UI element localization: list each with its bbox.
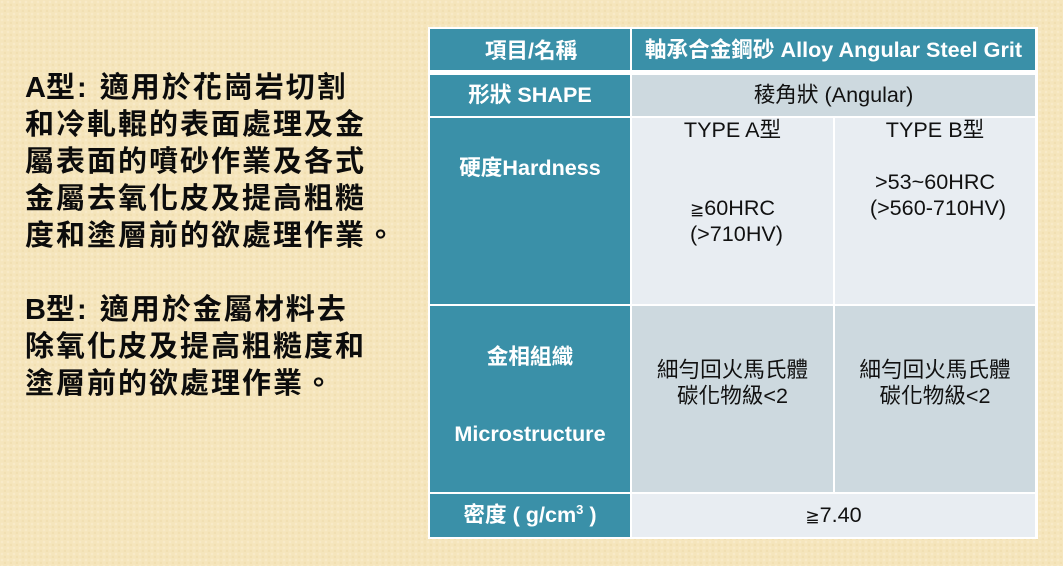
row label: hardness: 硬度Hardness: [459, 155, 601, 180]
cell: type B hardness: (>560-710HV): [870, 195, 1006, 220]
cell: type A microstructure: 碳化物級<2: [677, 383, 788, 408]
table header: item name: 項目/名稱: [485, 38, 577, 63]
row label: microstructure: [430, 306, 630, 492]
text: type A description: 度和塗層前的欲處理作業。: [25, 220, 397, 252]
row label: microstructure: Microstructure: [454, 421, 606, 446]
text: type A description: [25, 72, 397, 252]
text: type A description: 和冷軋輥的表面處理及金: [25, 109, 366, 141]
cell: type A hardness: [632, 118, 833, 304]
text block: type descriptions: [25, 72, 397, 400]
cell: type B hardness: [835, 118, 1035, 304]
cell: type B hardness: TYPE B型: [886, 117, 984, 142]
cell: type A hardness: TYPE A型: [684, 117, 781, 142]
text: type B description: 塗層前的欲處理作業。: [25, 368, 335, 400]
cell: type B microstructure: 碳化物級<2: [880, 383, 990, 408]
text: type B description: B型: 適用於金屬材料去: [25, 294, 348, 326]
row value: shape: [632, 75, 1035, 116]
row label: density: [430, 494, 630, 537]
row value: density: [632, 494, 1035, 537]
text: type A description: 屬表面的噴砂作業及各式: [25, 146, 366, 178]
cell: type A hardness: (>710HV): [690, 221, 783, 246]
table header: item name: [430, 29, 630, 70]
row label: shape: 形狀 SHAPE: [468, 82, 592, 107]
cell: type B hardness: >53~60HRC: [875, 169, 995, 194]
panel: specification table: [428, 27, 1038, 539]
row label: density: 密度 ( g/cm3 ): [463, 502, 597, 527]
cell: type B microstructure: 細勻回火馬氏體: [859, 357, 1011, 382]
cell: type B microstructure: [835, 306, 1035, 492]
cell: type A microstructure: [632, 306, 833, 492]
table header: product name: 軸承合金鋼砂 Alloy Angular Steel Grit: [645, 37, 1022, 62]
row value: shape: 稜角狀 (Angular): [754, 82, 913, 107]
text: type A description: A型: 適用於花崗岩切割: [25, 72, 348, 104]
text: type B description: [25, 294, 366, 400]
text: type B description: 除氧化皮及提高粗糙度和: [25, 331, 366, 363]
row label: shape: [430, 75, 630, 116]
row label: hardness: [430, 118, 630, 304]
row label: microstructure: 金相組織: [487, 344, 573, 369]
cell: type A hardness: ≧60HRC: [690, 195, 775, 220]
row value: density: ≧7.40: [805, 502, 862, 527]
cell: type A microstructure: 細勻回火馬氏體: [657, 357, 808, 382]
text: type A description: 金屬去氧化皮及提高粗糙: [25, 183, 366, 215]
table header: product name: [632, 29, 1035, 70]
